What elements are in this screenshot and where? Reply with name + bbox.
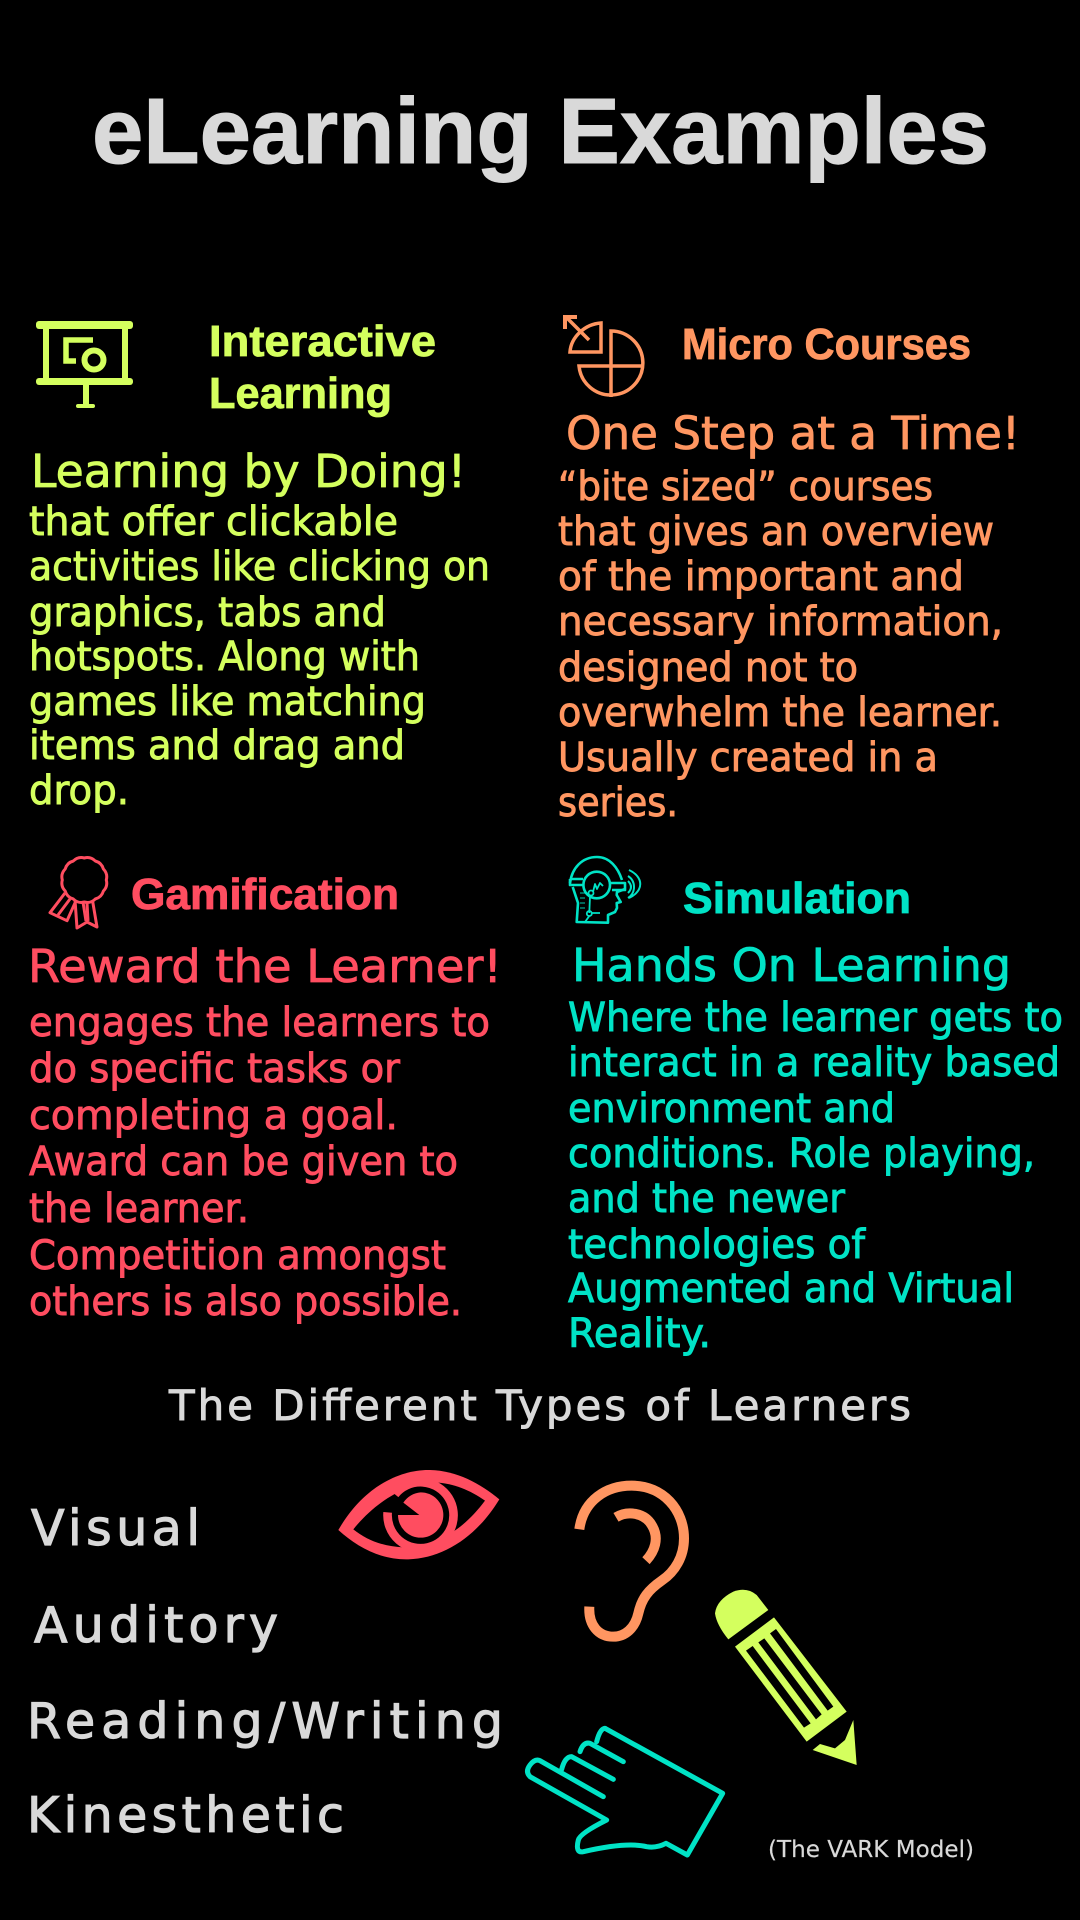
text block: simulation body: Reality. [568,1311,711,1357]
icon: eye [338,1470,499,1559]
text block: gamification body: engages the learners to [29,1000,490,1046]
panel: gamification [28,858,502,1325]
heading: simulation: Simulation [683,874,911,923]
icon: award ribbon [50,858,107,928]
text block: simulation body: Augmented and Virtual [568,1266,1014,1312]
text block: gamification body: Competition amongst [29,1233,446,1279]
text block: gamification body: completing a goal. [29,1093,398,1139]
text block: micro courses body: Usually created in a [558,735,938,781]
heading: interactive learning [209,317,436,418]
panel: simulation [568,857,1063,1357]
text block: gamification body: Award can be given to [29,1139,458,1185]
subheading: hands on learning: Hands On Learning [572,939,1011,992]
text block: simulation body: interact in a reality based [568,1040,1060,1086]
list: learner types: Reading/Writing [27,1693,503,1750]
heading: interactive learning: Interactive [209,317,436,366]
text block: interactive learning body: games like matching [29,679,426,725]
panel: micro courses [558,317,1020,826]
text block: gamification body: the learner. [29,1186,249,1232]
text block: interactive learning body [29,499,490,814]
text block: micro courses body: series. [558,780,678,826]
list: learner types: Kinesthetic [27,1787,344,1844]
text block: micro courses body: necessary information, [558,599,1003,645]
heading: interactive learning: Learning [209,369,392,418]
text block: interactive learning body: that offer clickable [29,499,398,545]
text block: micro courses body: of the important and [558,554,964,600]
icon: presentation screen [36,321,133,408]
icon: ear [579,1486,684,1637]
text block: simulation body: and the newer [568,1176,846,1222]
text block: interactive learning body: drop. [29,768,129,814]
text block: gamification body: others is also possible. [29,1279,462,1325]
text block: micro courses body: designed not to [558,645,858,691]
text block: micro courses body: overwhelm the learner. [558,690,1002,736]
text block: gamification body: do specific tasks or [29,1046,401,1092]
text block: micro courses body [558,464,1003,826]
list: learner types [27,1500,503,1844]
title: eLearning Examples [92,79,989,183]
text block: interactive learning body: items and drag and [29,723,405,769]
text block: interactive learning body: activities like clicking on [29,544,490,590]
text block: simulation body: conditions. Role playing, [568,1131,1035,1177]
text block: simulation body: Where the learner gets to [568,995,1063,1041]
heading: micro courses: Micro Courses [682,320,971,369]
icon: head with headset [570,857,640,923]
list: learner types: Visual [31,1500,200,1557]
subheading: one step at a time: One Step at a Time! [566,407,1020,460]
text block: micro courses body: that gives an overview [558,509,994,555]
subheading: reward the learner: Reward the Learner! [28,940,502,993]
text block: gamification body [29,1000,490,1325]
text block: interactive learning body: graphics, tabs and [29,590,386,636]
text block: simulation body: environment and [568,1086,895,1132]
heading: types of learners: The Different Types of Learners [168,1381,911,1430]
text block: simulation body: technologies of [568,1222,866,1268]
subheading: learning by doing: Learning by Doing! [31,445,466,498]
icon: pie chart with arrow [565,317,643,397]
text block: simulation body [568,995,1063,1357]
text block: micro courses body: “bite sized” courses [558,464,933,510]
icon: pointing hand [527,1728,723,1855]
icon: pencil [715,1590,857,1765]
panel: interactive learning [29,317,490,814]
heading: gamification: Gamification [131,870,399,919]
caption: the VARK model: (The VARK Model) [768,1837,974,1863]
text block: interactive learning body: hotspots. Along with [29,634,420,680]
list: learner types: Auditory [34,1597,278,1654]
